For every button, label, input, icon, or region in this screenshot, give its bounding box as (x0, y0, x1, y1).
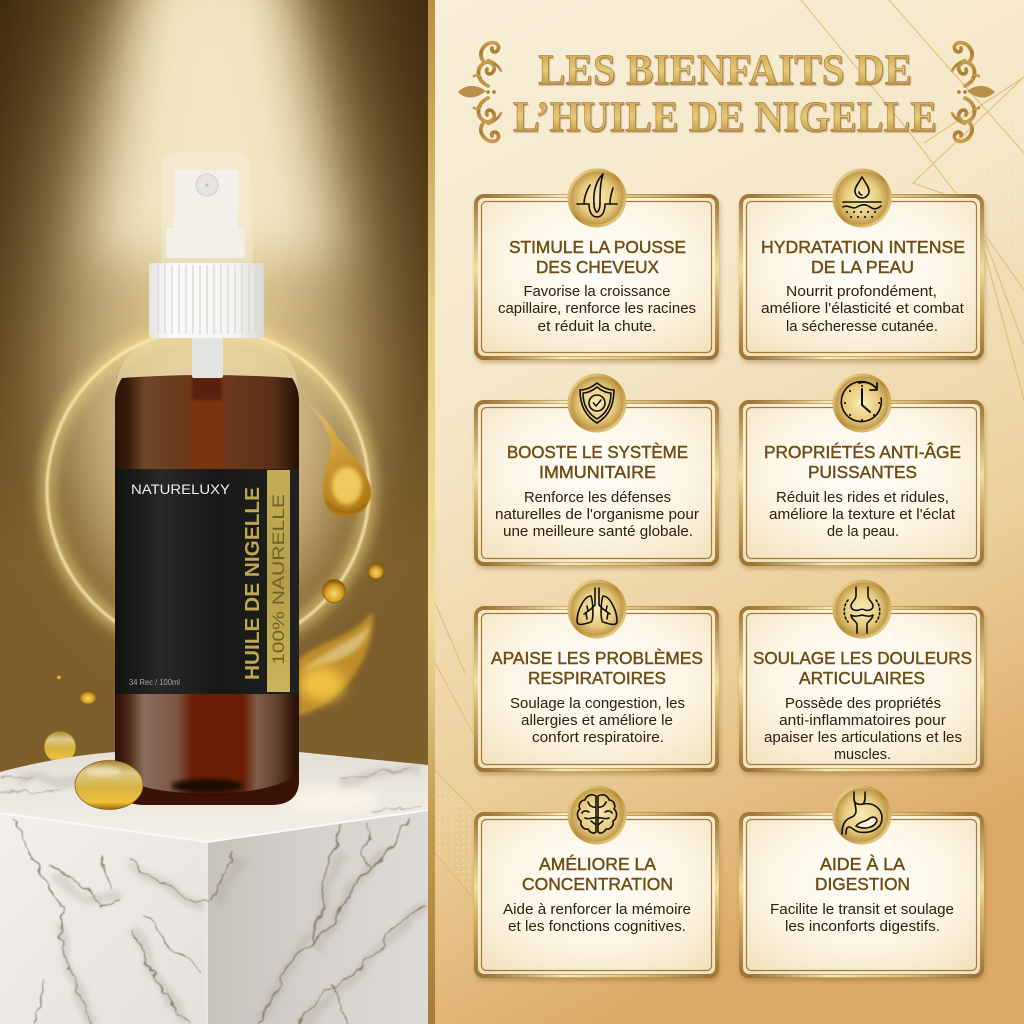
heading: ARTICULAIRES (799, 668, 925, 688)
heading (507, 442, 688, 482)
volume: 34 Rec / 100ml (129, 677, 180, 687)
icon: brain (577, 795, 617, 833)
soft gel capsule (75, 760, 143, 810)
heading: CONCENTRATION (522, 874, 673, 894)
ribbed collar (149, 263, 264, 338)
heading: AIDE À LA (820, 854, 905, 874)
icon: clock (841, 382, 881, 422)
oil drop (306, 402, 371, 517)
text block: Renforce les défenses (524, 489, 671, 506)
heading: DE LA PEAU (811, 257, 914, 277)
icon: lungs (577, 588, 617, 624)
heading: RESPIRATOIRES (528, 668, 666, 688)
text block: de la peau. (827, 523, 899, 540)
text block: améliore la texture et l'éclat (769, 506, 956, 523)
text block: Favorise la croissance (524, 283, 670, 300)
heading: IMMUNITAIRE (539, 462, 656, 482)
heading: STIMULE LA POUSSE (509, 237, 686, 257)
panel: hair growth (475, 168, 720, 363)
text block (510, 695, 685, 746)
heading (761, 237, 965, 277)
bottle glass shoulder (115, 338, 299, 805)
text block: muscles. (834, 746, 891, 763)
panel: immune system (475, 374, 720, 569)
text block: Aide à renforcer la mémoire (503, 901, 691, 918)
title: LES BIENFAITS DE (538, 47, 912, 94)
right panel background (435, 0, 1024, 1024)
panel: respiratory (475, 580, 720, 775)
text block (770, 901, 954, 935)
panel: skin hydration (740, 168, 985, 363)
text block (498, 283, 696, 335)
text block: une meilleure santé globale. (503, 523, 693, 540)
text block: et réduit la chute. (538, 318, 656, 335)
text block: anti-inflammatoires pour (779, 712, 946, 729)
natural claim: 100% NAURELLE (269, 494, 288, 665)
text block: les inconforts digestifs. (785, 918, 940, 935)
heading: PROPRIÉTÉS ANTI-ÂGE (764, 442, 961, 462)
marble veins (0, 768, 427, 1023)
pump head (166, 170, 245, 258)
heading (815, 854, 910, 894)
text block (769, 489, 956, 540)
heading: DES CHEVEUX (536, 257, 659, 277)
glowing golden ring (47, 329, 369, 651)
icon: hair follicle (577, 174, 617, 217)
heading: HYDRATATION INTENSE (761, 237, 965, 257)
clear overcap (162, 153, 252, 262)
oil droplets (44, 563, 384, 763)
heading (491, 648, 703, 688)
text block (764, 695, 962, 763)
oil splash (298, 612, 373, 716)
panel: concentration (475, 786, 720, 981)
text block: allergies et améliore le (521, 712, 673, 729)
heading (753, 648, 972, 688)
text block: apaiser les articulations et les (764, 729, 962, 746)
panel: joint pain (740, 580, 985, 775)
tube neck (192, 338, 223, 378)
text block: naturelles de l'organisme pour (495, 506, 699, 523)
heading (522, 854, 673, 894)
spray bottle (115, 153, 299, 806)
title (513, 47, 937, 141)
oil liquid (115, 375, 299, 470)
brand: NATURELUXY (131, 482, 230, 497)
text block: capillaire, renforce les racines (498, 300, 696, 317)
ornament: right (952, 43, 995, 141)
text block: Réduit les rides et ridules, (776, 489, 949, 506)
text block: Facilite le transit et soulage (770, 901, 954, 918)
dip tube (192, 378, 222, 400)
heading: SOULAGE LES DOULEURS (753, 648, 972, 668)
marble pedestal (0, 752, 428, 1024)
text block: améliore l'élasticité et combat (761, 300, 965, 317)
heading: DIGESTION (815, 874, 910, 894)
heading: BOOSTE LE SYSTÈME (507, 442, 688, 462)
heading: AMÉLIORE LA (539, 854, 656, 874)
icon: stomach (842, 792, 882, 834)
text block: et les fonctions cognitives. (508, 918, 686, 935)
text block (503, 901, 691, 935)
title: L’HUILE DE NIGELLE (513, 94, 937, 141)
text block (761, 283, 965, 335)
icon: knee joint (844, 587, 880, 633)
heading: PUISSANTES (808, 462, 917, 482)
label (115, 469, 299, 694)
soft marble clouds (20, 770, 427, 1023)
heading (764, 442, 961, 482)
text block: confort respiratoire. (532, 729, 664, 746)
text block (495, 489, 699, 540)
left scene background (0, 0, 428, 772)
text block: Possède des propriétés (785, 695, 941, 712)
text block: Nourrit profondément, (786, 283, 937, 300)
divider strip (428, 0, 435, 1024)
icon: shield (580, 383, 614, 423)
text block: Soulage la congestion, les (510, 695, 685, 712)
lower oil (115, 694, 299, 806)
text block: la sécheresse cutanée. (786, 318, 938, 335)
heading: APAISE LES PROBLÈMES (491, 648, 703, 668)
panel: anti-aging (740, 374, 985, 569)
panel: digestion (740, 786, 985, 981)
ornament: left (458, 43, 501, 141)
icon: drop on skin (843, 177, 881, 217)
product name: HUILE DE NIGELLE (241, 487, 264, 680)
heading (509, 237, 686, 277)
